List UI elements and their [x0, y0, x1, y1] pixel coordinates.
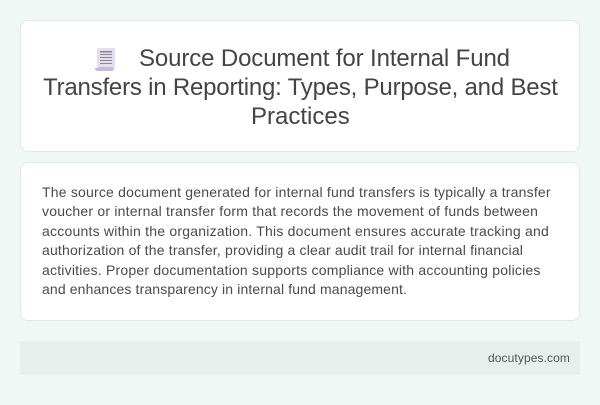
body text line 4: authorization of the transfer, providing a clear audit trail for internal financial: [42, 242, 523, 258]
body text line 1: The source document generated for internal fund transfers is typically a transfer: [42, 184, 551, 200]
body text line 5: activities. Proper documentation supports compliance with accounting policies: [42, 262, 541, 278]
body text line 3: accounts within the organization. This document ensures accurate tracking and: [42, 223, 549, 239]
footer source text: docutypes.com: [488, 351, 570, 365]
icon: document receipt: [95, 48, 115, 71]
body text line 2: voucher or internal transfer form that records the movement of funds between: [42, 203, 538, 219]
panel: description card: [20, 162, 580, 321]
title line 1: Source Document for Internal Fund: [139, 45, 510, 72]
body text line 6: and enhances transparency in internal fund management.: [42, 281, 407, 297]
panel: title card: [20, 20, 580, 152]
title line 2: Transfers in Reporting: Types, Purpose, and Best: [43, 74, 558, 101]
footer bar: [20, 341, 580, 375]
title line 3: Practices: [251, 103, 350, 130]
